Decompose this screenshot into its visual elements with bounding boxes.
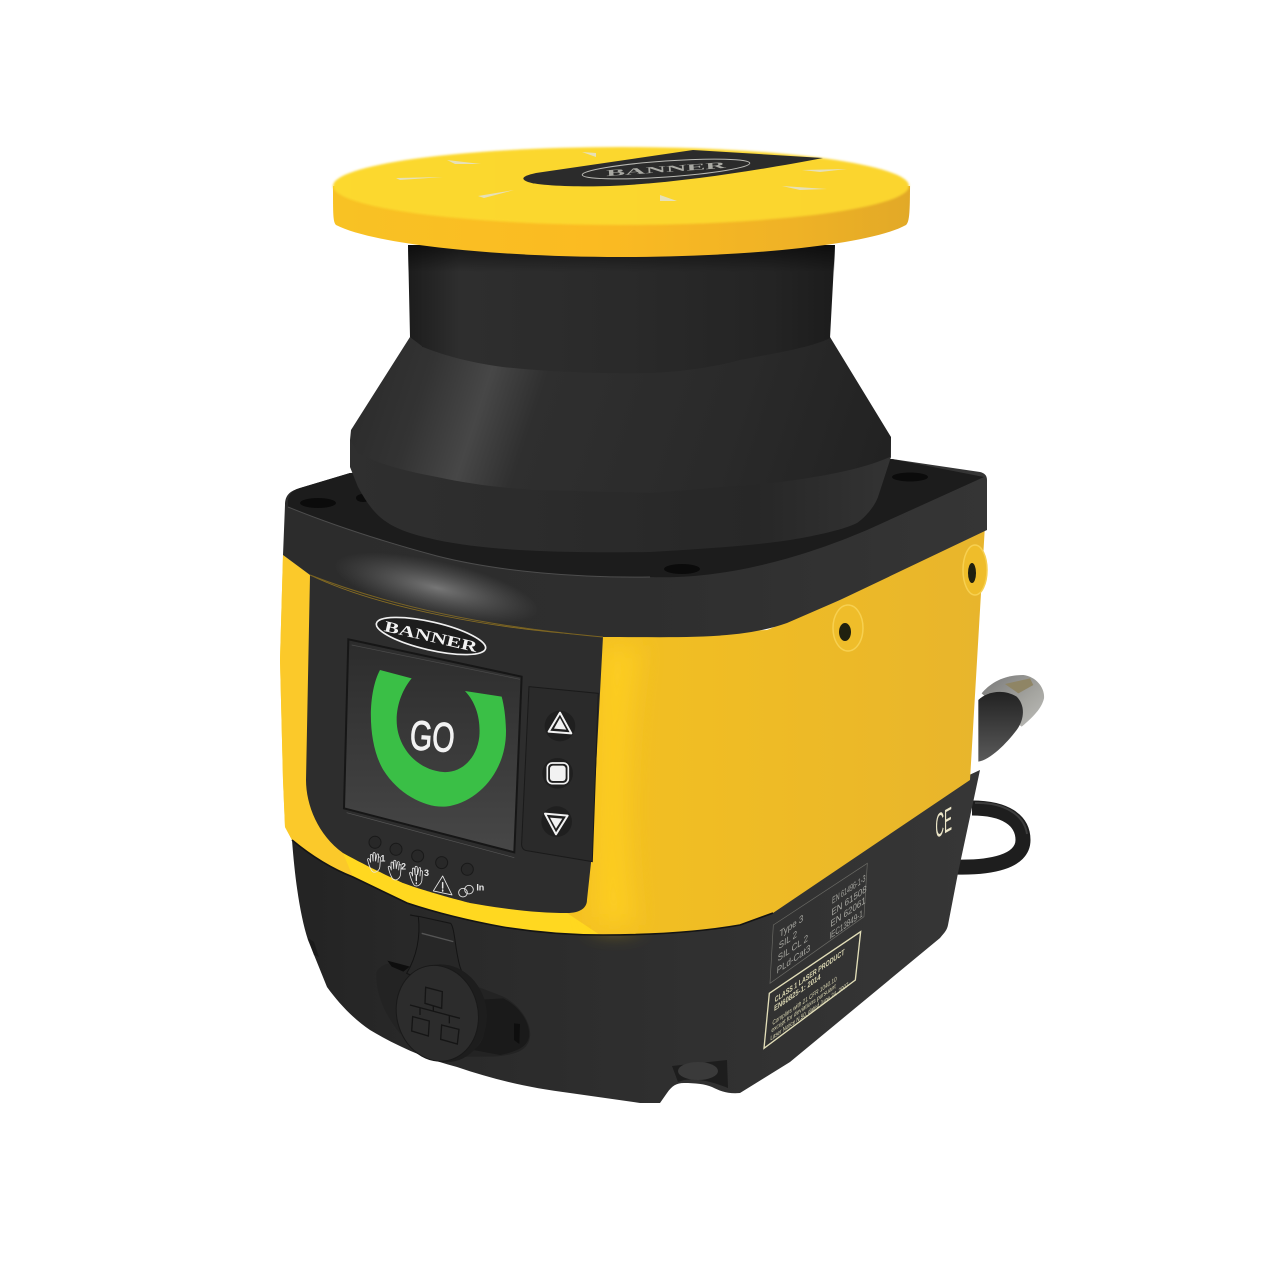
standards text: EN 61508	[831, 883, 867, 919]
zone and input labels	[380, 853, 484, 892]
standards text: EN 61496-1-3	[832, 873, 866, 907]
zone and input labels: 3	[424, 868, 429, 878]
down button	[541, 806, 572, 837]
up button	[545, 711, 575, 741]
plate top surface	[288, 459, 984, 577]
laser class box	[764, 932, 861, 1048]
standards text: PLd-Cat3	[777, 943, 810, 977]
ethernet port with cover	[376, 915, 530, 1072]
laser class text	[770, 947, 849, 1043]
cable loop	[955, 803, 1027, 867]
standards text: SIL CL 2	[778, 933, 808, 965]
standards text: IEC13849-1	[829, 908, 863, 942]
black label strip on cap	[523, 150, 823, 186]
lower black housing	[285, 770, 980, 1103]
cap logo: BANNER	[606, 160, 728, 178]
cap marker slivers	[396, 152, 847, 201]
status LEDs	[369, 836, 473, 875]
Banner logo: BANNER	[383, 618, 480, 656]
cone	[350, 337, 891, 493]
certification markings	[764, 801, 952, 1048]
yellow band highlight	[343, 853, 600, 935]
cap logo	[582, 155, 750, 183]
cylinder	[408, 245, 835, 373]
base seam line	[292, 840, 773, 935]
cover cap	[389, 955, 497, 1072]
zone hand icons	[368, 853, 473, 897]
yellow body	[280, 525, 985, 935]
standards text: SIL 2	[779, 929, 797, 952]
side nub	[308, 938, 319, 957]
standards text: EN 62061	[830, 895, 866, 930]
mounting bosses	[833, 545, 987, 651]
Banner logo	[373, 610, 489, 662]
zone and input labels: 1	[380, 853, 385, 863]
cover flap	[407, 915, 472, 1000]
lower collar	[350, 437, 891, 552]
laser class text: Laser Notice N.50, dated June 24, 2007	[770, 981, 849, 1043]
M12 connector	[978, 675, 1044, 762]
network symbol	[410, 987, 460, 1044]
plate screws	[300, 472, 928, 574]
button pad	[522, 687, 598, 862]
standards box	[770, 863, 867, 983]
standards text: Type 3	[779, 913, 803, 940]
laser class text: Complies with 21 CFR 1040.10	[772, 976, 837, 1027]
laser class text: EN60825-1: 2014	[774, 972, 821, 1013]
GO text: GO	[408, 712, 456, 761]
laser class text: CLASS 1 LASER PRODUCT	[775, 947, 845, 1005]
bottom notch	[672, 1060, 728, 1088]
zone and input labels: 2	[401, 861, 406, 871]
laser class text: except for deviations pursuant	[771, 983, 836, 1035]
black scanner dome	[350, 245, 891, 552]
yellow cap	[333, 147, 910, 257]
front control panel	[306, 575, 603, 913]
green status ring	[371, 670, 506, 807]
display screen	[344, 639, 522, 852]
zone and input labels: In	[476, 882, 484, 892]
port recess	[376, 963, 530, 1057]
top mounting plate	[283, 459, 987, 638]
stop button	[542, 758, 573, 789]
standards text	[777, 873, 867, 977]
CE mark: CE	[935, 801, 952, 847]
